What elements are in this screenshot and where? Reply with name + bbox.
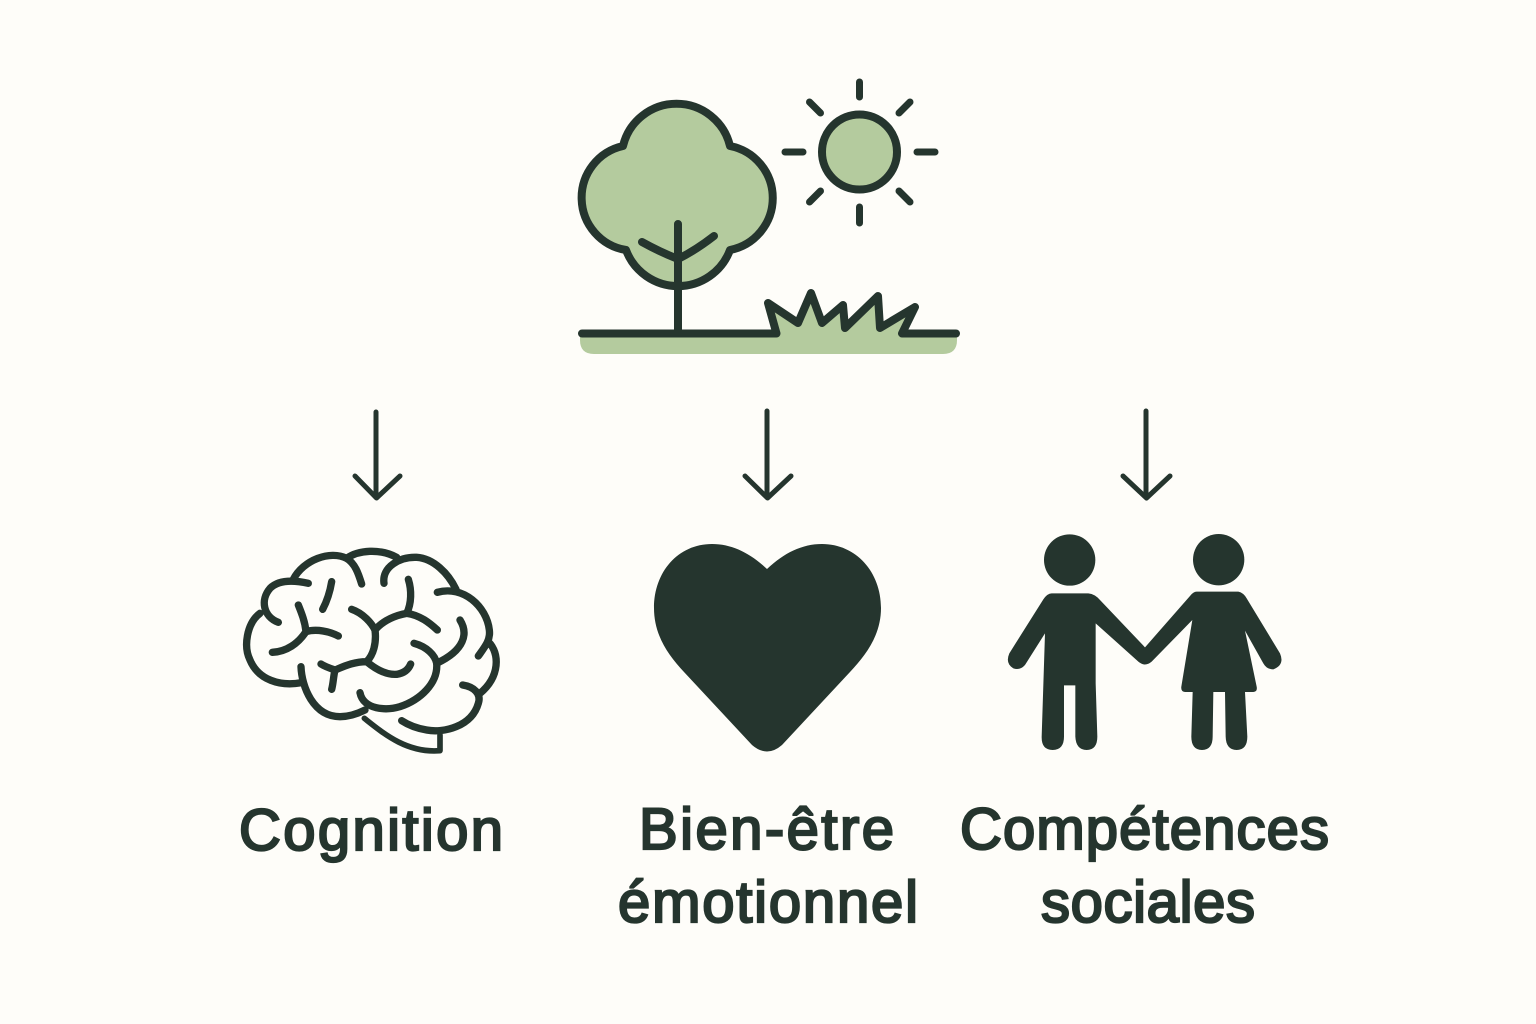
icon: two people holding hands — [1008, 534, 1281, 750]
icon: heart — [654, 544, 881, 752]
label: emotional well-being — [618, 797, 918, 935]
ground line and grass outline — [582, 293, 956, 334]
label: emotional well-being: Bien-être — [639, 797, 894, 862]
label: social skills: sociales — [1041, 870, 1255, 935]
label: cognition: Cognition — [239, 798, 503, 863]
ground band — [580, 336, 957, 354]
tree trunk and branches — [642, 224, 714, 333]
tree crown — [582, 104, 773, 286]
arrow: to social skills — [1123, 411, 1170, 498]
sun disc — [822, 114, 897, 190]
arrow: to cognition — [355, 412, 400, 498]
icon: brain — [247, 551, 496, 751]
label: social skills — [960, 797, 1329, 935]
grass fill — [768, 293, 915, 340]
sun rays — [785, 82, 935, 223]
icon: nature scene with tree, sun and grass — [580, 82, 957, 354]
label: social skills: Compétences — [960, 797, 1329, 862]
label: emotional well-being: émotionnel — [618, 870, 918, 935]
arrow: to emotional well-being — [745, 411, 791, 498]
